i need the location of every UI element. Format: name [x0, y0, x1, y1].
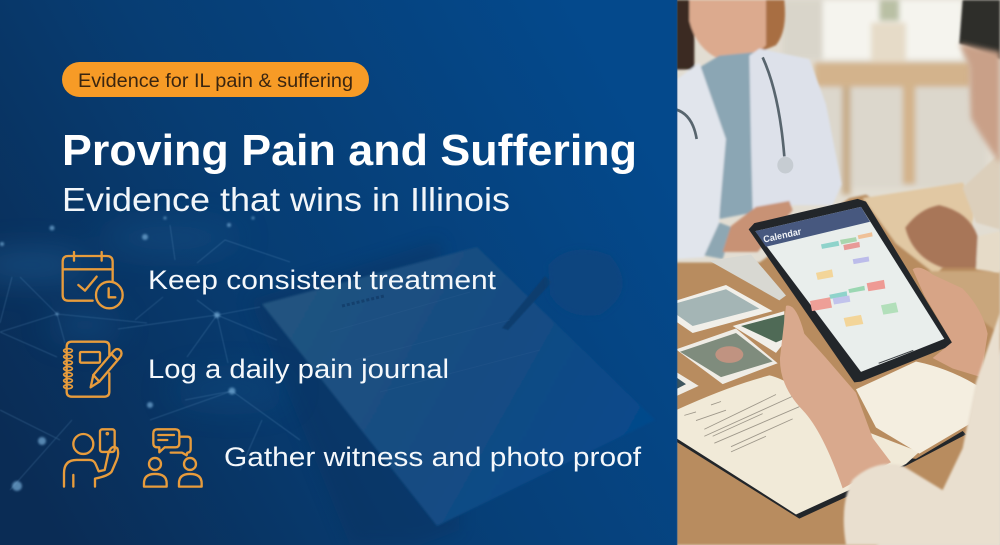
badge text: Evidence for IL pain & suffering [78, 70, 353, 92]
background: faint notebook and hand [250, 240, 655, 545]
tablet: title: Calendar [762, 226, 802, 245]
photo: printed pictures [676, 285, 784, 396]
photo: open handwritten notebook [676, 362, 978, 519]
photo: left edge shade [676, 0, 677, 545]
text: log a daily pain journal: Log a daily pain journal [148, 354, 449, 384]
badge [62, 62, 369, 97]
photo: tablet with calendar [749, 199, 952, 382]
tablet: screen [755, 207, 944, 372]
tablet: header bar [755, 207, 870, 247]
background: network lines [0, 225, 300, 490]
photo: foreground person [844, 0, 1000, 545]
photo: back room and shelf [783, 0, 986, 195]
background: network nodes [0, 216, 254, 491]
panel: photo of patient with tablet calendar and doctor [676, 0, 1000, 545]
photo: clasped hands of second person [905, 153, 1000, 273]
photo: wooden table [676, 182, 1000, 545]
photo: doctor [676, 0, 842, 259]
tablet: home bar [879, 350, 913, 363]
tablet: frame [749, 199, 952, 382]
photo: room wall [676, 0, 1000, 545]
background: network glow [0, 224, 290, 404]
text: gather witness and photo proof: Gather witness and photo proof [224, 442, 642, 472]
title: Proving Pain and Suffering [62, 126, 637, 175]
tablet: calendar events [810, 232, 898, 327]
icon: notebook with pen [64, 342, 122, 397]
photo: clipboard under tablet [709, 254, 786, 300]
subtitle: Evidence that wins in Illinois [62, 181, 510, 218]
text: keep consistent treatment: Keep consistent treatment [148, 265, 497, 295]
icon: person taking phone photo [64, 429, 118, 487]
photo: right hand holding tablet [913, 268, 988, 377]
photo: left hand holding tablet [780, 306, 891, 488]
icon: two people talking [144, 429, 202, 487]
panel: blue background [0, 0, 677, 545]
icon: calendar with clock [63, 252, 123, 308]
